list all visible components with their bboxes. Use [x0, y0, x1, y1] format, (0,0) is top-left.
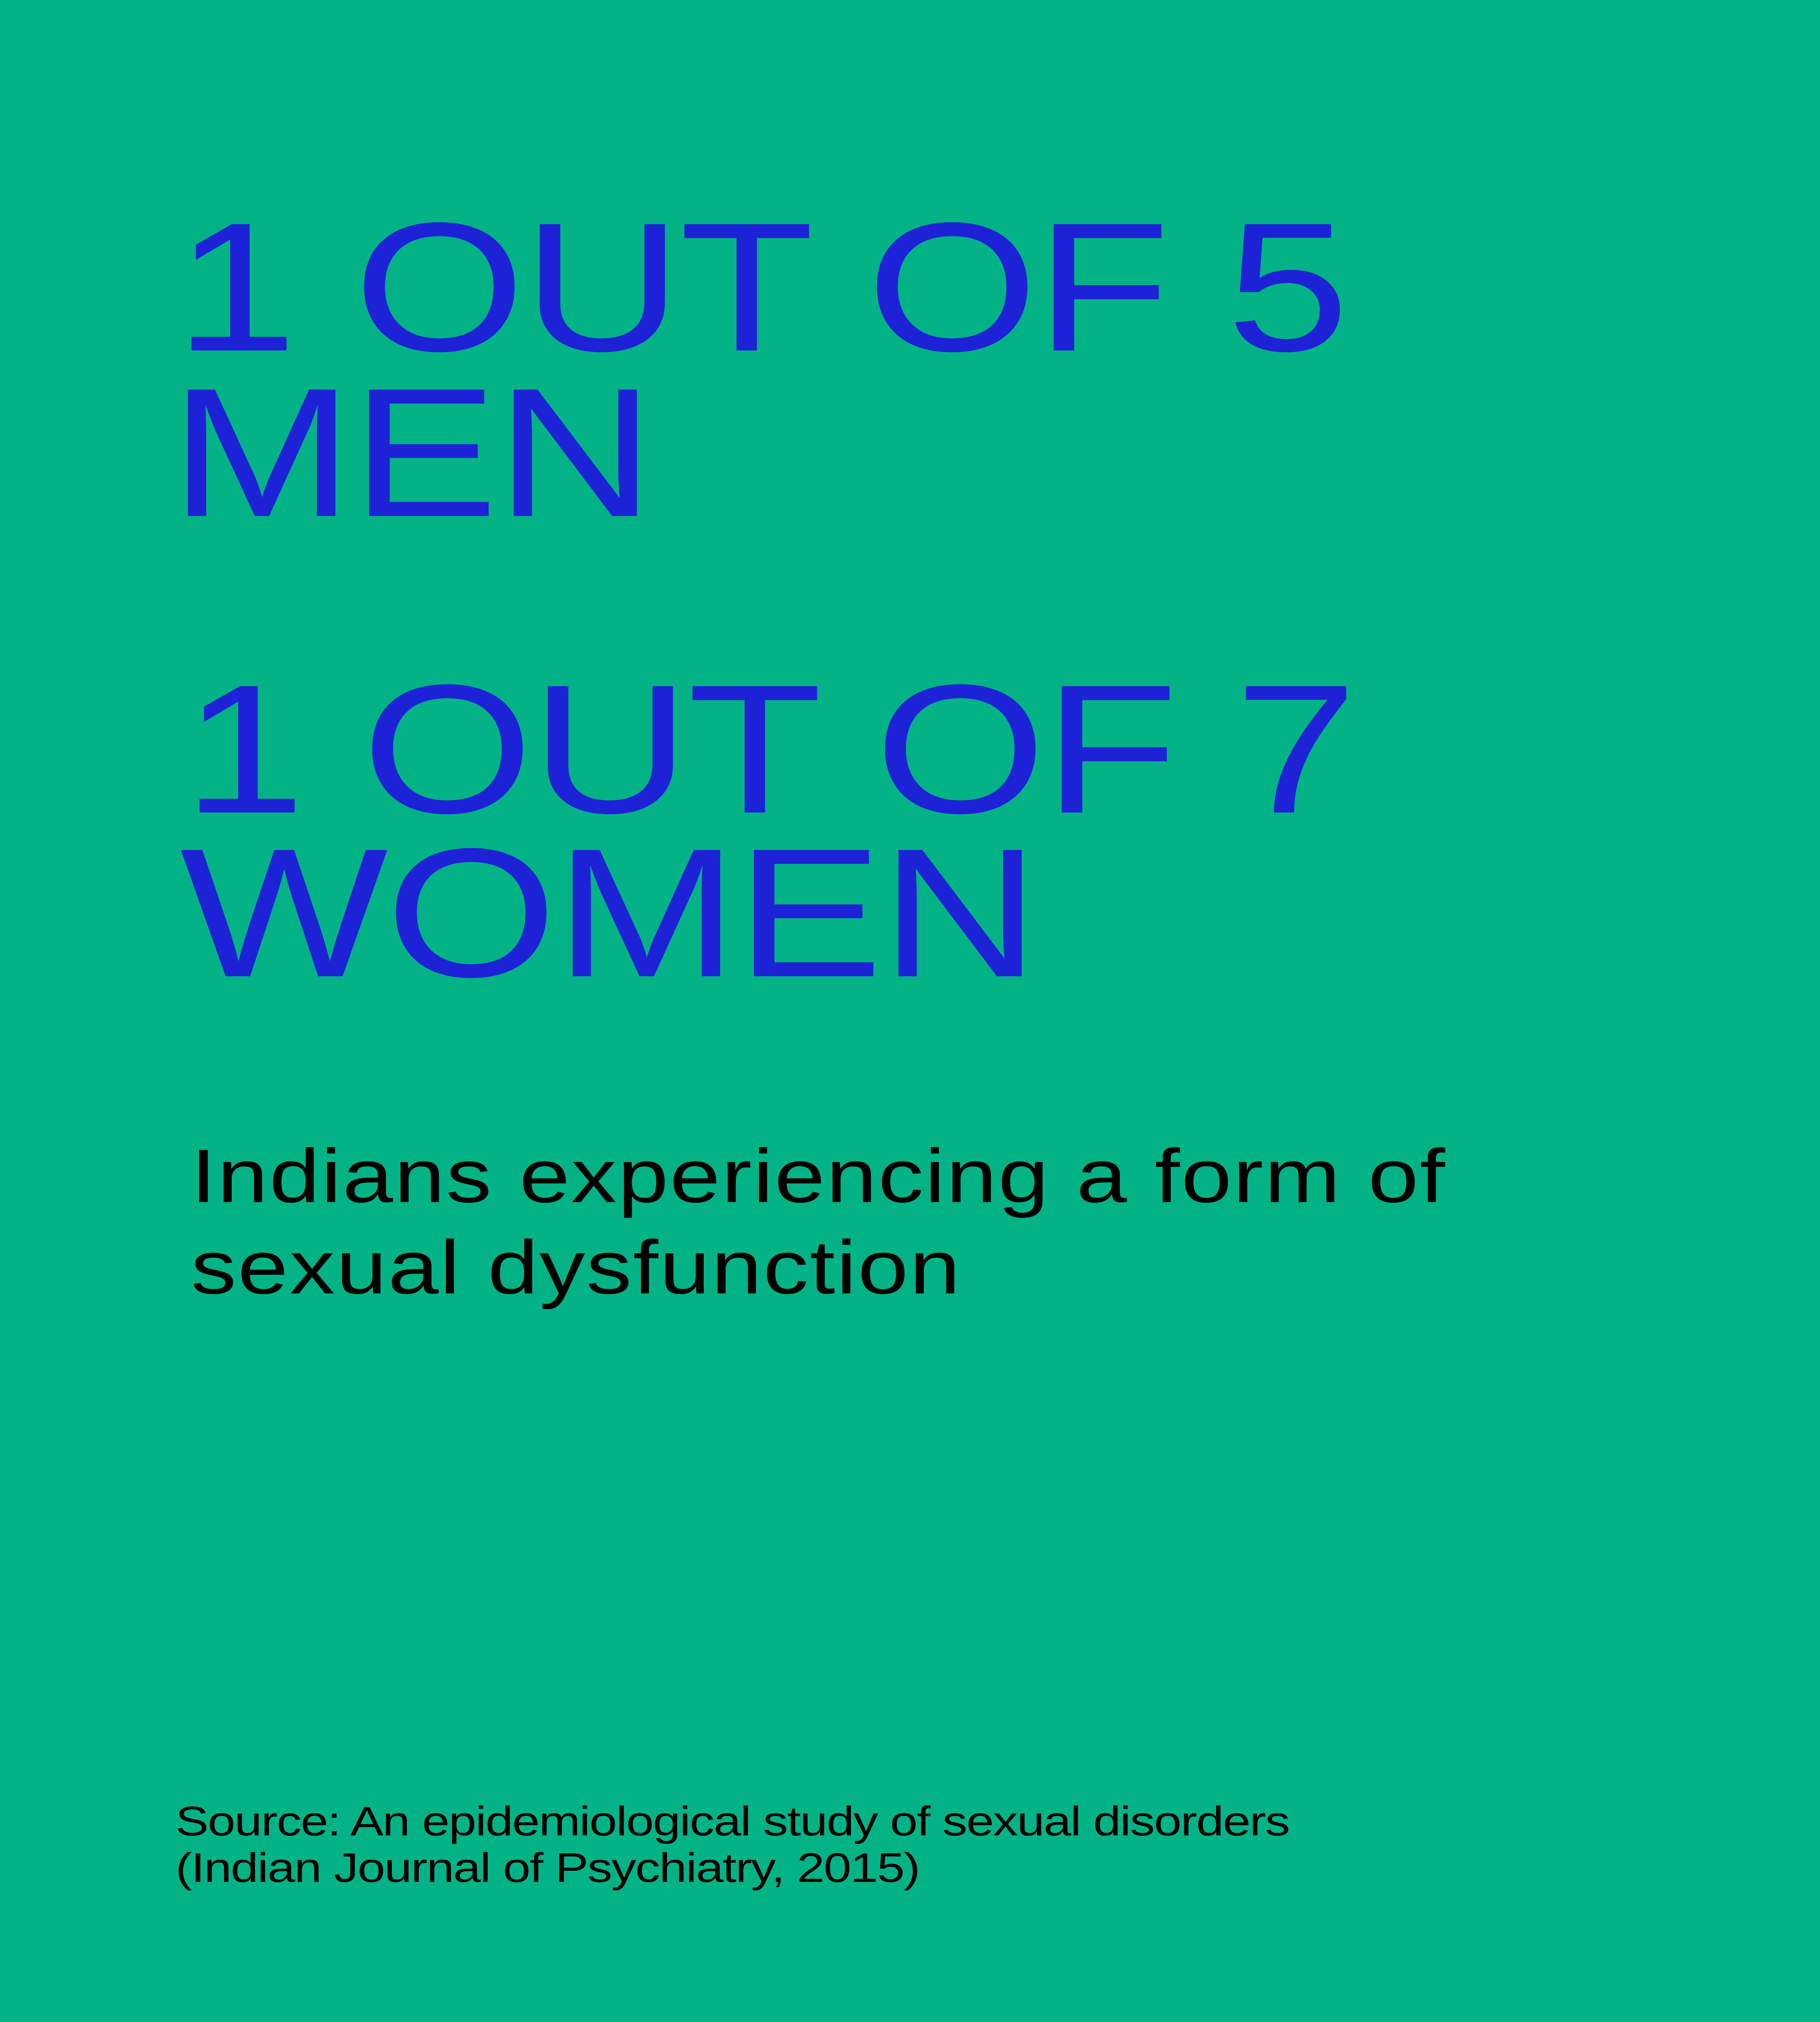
headline line: men: MEN — [170, 350, 652, 555]
headline line: women: WOMEN — [180, 810, 1037, 1015]
subtitle text block — [191, 1134, 1446, 1309]
subtitle text block: sexual dysfunction — [191, 1225, 961, 1309]
headline: men statistic — [170, 185, 1347, 555]
source note: (Indian Journal of Psychiatry, 2015) — [176, 1844, 919, 1891]
subtitle text block: Indians experiencing a form of — [191, 1134, 1446, 1218]
source note — [176, 1798, 1289, 1891]
source note: Source: An epidemiological study of sexual disorders — [176, 1798, 1289, 1844]
headline: women statistic — [180, 647, 1355, 1015]
headline line: 1 out of 7: 1 OUT OF 7 — [183, 647, 1355, 852]
headline line: 1 out of 5: 1 OUT OF 5 — [175, 185, 1347, 390]
